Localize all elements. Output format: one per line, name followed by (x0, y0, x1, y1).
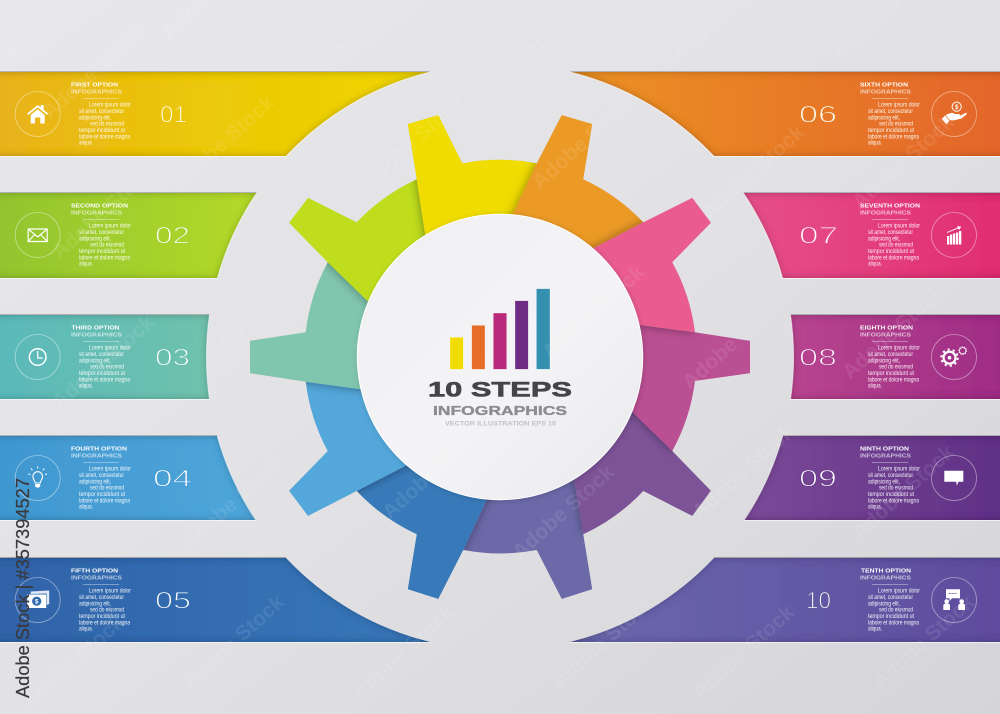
text: fourth option: INFOGRAPHICS (71, 453, 122, 459)
watermark pattern: Adobe Stock (48, 311, 159, 414)
center caption: VECTOR ILLUSTRATION EPS 10 (445, 422, 557, 428)
text: tenth option: aliqua. (868, 626, 882, 633)
band 2: second option (0, 192, 257, 278)
text: tenth option: sit amet, consectetur (868, 594, 913, 601)
text: seventh option: aliqua. (868, 261, 882, 268)
number 04: 04 (153, 466, 192, 492)
icon: speech bubble (932, 456, 976, 500)
band 3: third option (0, 314, 210, 400)
gear segment: magenta (630, 325, 750, 452)
text: fourth option: FOURTH OPTION (71, 447, 127, 453)
text: first option: Lorem ipsum dolor (89, 102, 131, 109)
text: tenth option: adipisicing elit, (868, 600, 900, 607)
watermark pattern: Adobe Stock (168, 91, 279, 194)
text: seventh option: Lorem ipsum dolor (878, 223, 920, 230)
text: fifth option: Lorem ipsum dolor (89, 588, 131, 595)
icon: gears (932, 334, 976, 380)
watermark pattern: Adobe Stock (838, 281, 949, 384)
text: eighth option (860, 326, 920, 390)
chart: ten-segment gear (250, 115, 750, 599)
text: second option: labore et dolore magna (79, 254, 130, 261)
text: third option: INFOGRAPHICS (71, 332, 122, 338)
text: sixth option: sit amet, consectetur (868, 108, 913, 115)
text: second option: sit amet, consectetur (79, 229, 124, 236)
text: fourth option: labore et dolore magna (79, 497, 130, 504)
gear segment: violet (464, 480, 592, 599)
text: eighth option: sed do eiusmod (879, 364, 913, 371)
text: second option: INFOGRAPHICS (71, 210, 122, 216)
text: fifth option: FIFTH OPTION (71, 569, 118, 575)
number 05: 05 (155, 588, 191, 614)
watermark pattern: Adobe Stock (868, 591, 979, 694)
text: fifth option: adipisicing elit, (79, 600, 111, 607)
band 5: fifth option (0, 558, 430, 642)
text: sixth option: INFOGRAPHICS (860, 89, 911, 95)
text: first option: labore et dolore magna (79, 133, 130, 140)
text: second option: sed do eiusmod (90, 242, 124, 249)
text: third option: labore et dolore magna (79, 376, 130, 383)
text: ninth option: sed do eiusmod (879, 485, 913, 492)
text: eighth option: Lorem ipsum dolor (878, 345, 920, 352)
watermark pattern: Adobe Stock (38, 21, 149, 124)
watermark pattern: Adobe Stock (678, 291, 789, 394)
text: ninth option: sit amet, consectetur (868, 472, 913, 479)
text: ninth option: labore et dolore magna (868, 497, 919, 504)
text: fourth option: adipisicing elit, (79, 478, 111, 485)
text: second option: Lorem ipsum dolor (89, 223, 131, 230)
text: third option: tempor incididunt ut (79, 370, 125, 377)
icon: money (15, 578, 60, 622)
bar chart logo (450, 289, 550, 369)
text: eighth option: labore et dolore magna (868, 376, 919, 383)
watermark pattern: Adobe Stock (688, 601, 799, 704)
text: second option: tempor incididunt ut (79, 248, 125, 255)
text: seventh option: adipisicing elit, (868, 235, 900, 242)
text: eighth option: aliqua. (868, 383, 882, 390)
icon: light bulb (15, 456, 60, 500)
text: seventh option: INFOGRAPHICS (860, 210, 911, 216)
watermark pattern: Adobe Stock (698, 121, 809, 224)
text: fourth option: sed do eiusmod (90, 485, 124, 492)
icon: envelope (15, 212, 60, 258)
gear segment: yellow (408, 115, 537, 238)
text: tenth option: TENTH OPTION (861, 569, 911, 575)
text: sixth option: adipisicing elit, (868, 114, 900, 121)
text: second option: adipisicing elit, (79, 235, 111, 242)
text: seventh option (860, 204, 920, 268)
text: first option: sed do eiusmod (90, 121, 124, 128)
band 6: sixth option (570, 72, 1000, 156)
text: fifth option (71, 569, 131, 633)
text: sixth option (860, 83, 920, 147)
gear segment: green (289, 179, 426, 307)
text: second option: aliqua. (79, 261, 93, 268)
text: seventh option: sed do eiusmod (879, 242, 913, 249)
text: second option: SECOND OPTION (71, 204, 128, 210)
text: fifth option: labore et dolore magna (79, 619, 130, 626)
text: sixth option: aliqua. (868, 140, 882, 147)
text: first option: sit amet, consectetur (79, 108, 124, 115)
band 8: eighth option (790, 314, 1000, 400)
text: ninth option (860, 447, 920, 511)
icon: hand with coin (932, 92, 976, 136)
band 1: first option (0, 72, 430, 156)
text: third option: aliqua. (79, 383, 93, 390)
band 10: tenth option (570, 558, 1000, 642)
watermark pattern: Adobe Stock (688, 421, 799, 524)
number 09: 09 (799, 466, 837, 492)
text: ninth option: adipisicing elit, (868, 478, 900, 485)
text: tenth option (860, 569, 920, 633)
number 01: 01 (160, 102, 187, 128)
text: first option: aliqua. (79, 140, 93, 147)
band 7: seventh option (743, 192, 1000, 278)
text: first option: tempor incididunt ut (79, 127, 125, 134)
text: sixth option: Lorem ipsum dolor (878, 102, 920, 109)
text: fourth option (71, 447, 131, 511)
gear segment: dark blue (356, 466, 492, 599)
watermark pattern: Adobe Stock (178, 451, 289, 554)
text: third option: sit amet, consectetur (79, 351, 124, 358)
gear segment: purple (570, 412, 711, 536)
text: first option (71, 83, 131, 147)
text: tenth option: INFOGRAPHICS (860, 575, 911, 581)
text: seventh option: sit amet, consectetur (868, 229, 913, 236)
watermark pattern: Adobe Stock (213, 251, 324, 354)
vertical stock id: Adobe Stock | #357394527 (12, 478, 33, 698)
center subtitle: INFOGRAPHICS (433, 403, 567, 418)
text: third option: THIRD OPTION (72, 326, 120, 332)
text: eighth option: adipisicing elit, (868, 357, 900, 364)
icon: hand with coin: $ (955, 104, 959, 111)
watermark pattern: Adobe Stock (18, 611, 129, 714)
watermark pattern: Adobe Stock (508, 461, 619, 564)
text: tenth option: tempor incididunt ut (868, 613, 914, 620)
text: fourth option: aliqua. (79, 504, 93, 511)
text: sixth option: SIXTH OPTION (860, 83, 908, 89)
text: third option: adipisicing elit, (79, 357, 111, 364)
text: tenth option: labore et dolore magna (868, 619, 919, 626)
band 9: ninth option (744, 436, 1000, 520)
watermark pattern: Adobe Stock (348, 261, 459, 364)
text: first option: INFOGRAPHICS (71, 89, 122, 95)
watermark pattern: Adobe Stock (378, 421, 489, 524)
gear segment: teal (250, 262, 368, 396)
text: eighth option: EIGHTH OPTION (860, 326, 913, 332)
text: seventh option: tempor incididunt ut (868, 248, 914, 255)
text: eighth option: tempor incididunt ut (868, 370, 914, 377)
text: ninth option: tempor incididunt ut (868, 491, 914, 498)
number 10: 10 (806, 588, 831, 614)
band 4: fourth option (0, 436, 256, 520)
text: ninth option: INFOGRAPHICS (860, 453, 911, 459)
text: fifth option: tempor incididunt ut (79, 613, 125, 620)
text: fifth option: INFOGRAPHICS (71, 575, 122, 581)
watermark pattern: Adobe Stock (178, 591, 289, 694)
gear segment: orange (506, 115, 644, 248)
text: eighth option: sit amet, consectetur (868, 351, 913, 358)
watermark pattern: Adobe Stock (48, 161, 159, 264)
icon: money: $ (35, 598, 39, 605)
text: second option (71, 204, 131, 268)
text: tenth option: Lorem ipsum dolor (878, 588, 920, 595)
number 02: 02 (155, 222, 190, 250)
watermark pattern: Adobe Stock (848, 111, 959, 214)
watermark pattern: Adobe Stock (528, 91, 639, 194)
text: ninth option: Lorem ipsum dolor (878, 466, 920, 473)
text: seventh option: SEVENTH OPTION (860, 204, 920, 210)
watermark pattern: Adobe Stock (548, 591, 659, 694)
icon: clock (15, 334, 60, 380)
text: sixth option: tempor incididunt ut (868, 127, 914, 134)
text: third option: Lorem ipsum dolor (89, 345, 131, 352)
text: third option (71, 326, 131, 390)
number 08: 08 (799, 344, 837, 372)
watermark pattern: Adobe Stock (538, 261, 649, 364)
text: ninth option: aliqua. (868, 504, 882, 511)
text: fourth option: sit amet, consectetur (79, 472, 124, 479)
text: ninth option: NINTH OPTION (860, 447, 909, 453)
text: eighth option: INFOGRAPHICS (860, 332, 911, 338)
text: sixth option: sed do eiusmod (879, 121, 913, 128)
icon: home (15, 92, 60, 136)
center disc (357, 214, 643, 500)
number 06: 06 (799, 102, 837, 128)
text: third option: sed do eiusmod (90, 364, 124, 371)
center title: 10 STEPS (428, 379, 572, 402)
gear segment: pink (588, 198, 711, 337)
watermark pattern: Adobe Stock (848, 441, 959, 544)
text: fifth option: aliqua. (79, 626, 93, 633)
text: fourth option: tempor incididunt ut (79, 491, 125, 498)
text: first option: FIRST OPTION (71, 83, 118, 89)
text: fourth option: Lorem ipsum dolor (89, 466, 131, 473)
gear segment: light blue (289, 382, 410, 516)
watermark pattern: Adobe Stock (348, 601, 459, 704)
number 07: 07 (799, 222, 838, 250)
text: tenth option: sed do eiusmod (879, 607, 913, 614)
text: fifth option: sit amet, consectetur (79, 594, 124, 601)
number 03: 03 (155, 344, 190, 372)
watermark pattern: Adobe Stock (358, 91, 469, 194)
text: sixth option: labore et dolore magna (868, 133, 919, 140)
icon: rising chart (932, 212, 976, 258)
text: fifth option: sed do eiusmod (90, 607, 124, 614)
text: first option: adipisicing elit, (79, 114, 111, 121)
text: seventh option: labore et dolore magna (868, 254, 919, 261)
icon: people talking (932, 578, 976, 622)
